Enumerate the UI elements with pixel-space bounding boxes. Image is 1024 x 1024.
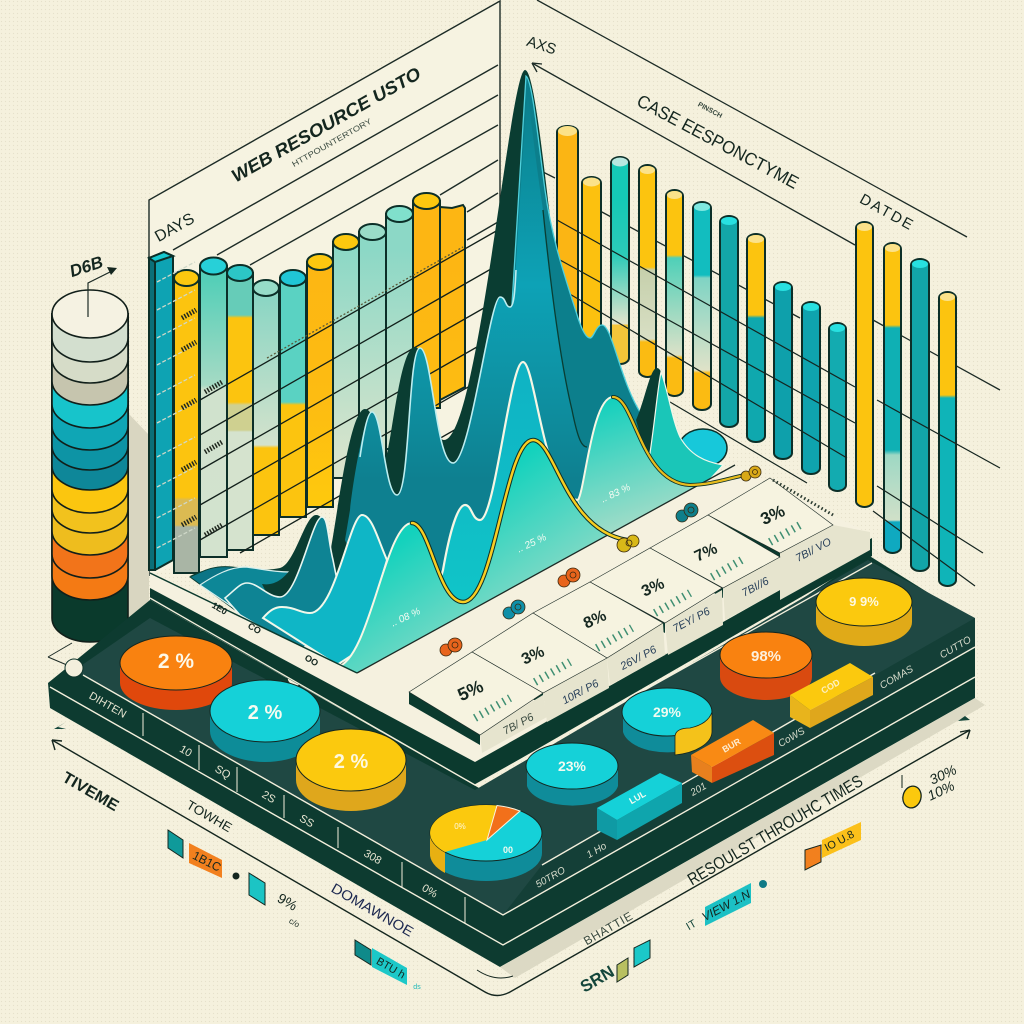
- cyan end blob: [679, 429, 727, 467]
- stack label and arrow: [67, 252, 117, 317]
- right wall bars: [557, 126, 956, 586]
- small end peak face: [650, 372, 723, 490]
- pie chart disc: 0%: [454, 822, 466, 831]
- label: days: DAYS: [152, 210, 197, 246]
- slab right front labels: 201: [688, 781, 709, 799]
- left wall lines over bars: [157, 230, 498, 553]
- small end peak dark side: [636, 368, 690, 470]
- percent cards: [409, 478, 870, 753]
- bar 10: [802, 302, 820, 474]
- card 5: 7%: [692, 540, 720, 566]
- bar 11: [829, 323, 846, 491]
- legend item: teal with cyan label: BTU h: [374, 955, 407, 981]
- card 6: 3%: [758, 501, 788, 529]
- bar 1: [149, 252, 173, 570]
- ridge highlight and inner line: [360, 210, 587, 495]
- pie chart disc: [430, 805, 542, 881]
- knot teal 2: [676, 503, 698, 522]
- cream platform floor: [150, 465, 872, 762]
- knot orange 1: [440, 638, 462, 656]
- disc: cyan 2%: 2 %: [248, 702, 282, 724]
- card 6: 7BI/ VO: [794, 536, 834, 565]
- dark low shoulder: [262, 515, 345, 620]
- card 1: 5%: [454, 676, 486, 705]
- card 2: 10R/ P6: [560, 677, 602, 707]
- legend dot teal: [759, 880, 767, 888]
- bar 9: [774, 282, 792, 459]
- box: yellow: COD: [819, 677, 842, 696]
- legend item: cyan label: [684, 883, 753, 933]
- bar 2: [582, 177, 601, 367]
- legend item: yellow circle percent: [900, 761, 959, 810]
- disc: yellow 2%: [296, 729, 406, 811]
- wall heading: web resource: WEB RESOURCE USTO: [228, 63, 424, 186]
- knot gold: [741, 466, 761, 481]
- platform dark edge: [150, 465, 872, 785]
- cyan centre peak: [420, 362, 600, 650]
- label: date: DATDE: [857, 191, 916, 234]
- card 4: [590, 548, 723, 655]
- yellow trend lines: [412, 397, 745, 602]
- slab divider lines: [50, 647, 975, 945]
- dark rear silhouette: [190, 70, 600, 673]
- slab right front labels: COMAS: [878, 664, 916, 692]
- card 1: [409, 652, 547, 753]
- legend item: teal with cyan label: [355, 940, 421, 991]
- slab left front labels: 2S: [260, 789, 277, 806]
- slab right front labels: 1 Ho: [585, 841, 609, 861]
- mountain chart: [190, 70, 735, 690]
- card 2: [472, 613, 609, 722]
- cyan left hump: [263, 515, 387, 665]
- bar 5: [666, 190, 683, 396]
- bar 1: [557, 126, 578, 386]
- legend item: cyan with percent: [249, 873, 302, 930]
- bar 4: [227, 265, 253, 550]
- card 6: [708, 478, 870, 600]
- disc: cyan 29%: [622, 688, 712, 755]
- knot orange 2: [558, 568, 580, 587]
- card 4: 7EY/ P6: [671, 605, 713, 635]
- marker knots: [440, 466, 761, 656]
- bar 5: [253, 280, 279, 535]
- legend item: orange with yellow label: IO U.8: [823, 829, 856, 854]
- legend item: cyan with percent: c/o: [287, 916, 302, 930]
- box: orange: [691, 720, 774, 783]
- card 1: 7B/ P6: [501, 711, 537, 737]
- wall heading: web resource: HTTPOUNTERTORY: [290, 116, 374, 169]
- wall heading: case response time: CASE EESPONCTYME: [634, 91, 802, 193]
- strip labels: CO: [246, 621, 263, 636]
- platform connector circles: [48, 643, 305, 686]
- disc: cyan 23%: 23%: [558, 758, 587, 774]
- disc: cyan 2%: [210, 680, 320, 762]
- chart value labels: [390, 482, 632, 629]
- bar 7: [720, 216, 738, 427]
- chart value labels: .. 25 %: [516, 532, 548, 555]
- bar 3: [611, 157, 629, 364]
- card 3: [533, 582, 665, 685]
- right wall lines: [532, 0, 1000, 390]
- card 3: 26V/ P6: [618, 643, 659, 673]
- slab right front labels: CoWS: [776, 726, 807, 750]
- slab left front labels: 10: [177, 743, 194, 760]
- bar 10: [386, 206, 413, 449]
- stack label and arrow: D6B: [67, 252, 105, 281]
- teal front left hump: [225, 517, 345, 650]
- disc: cyan 29%: 29%: [653, 704, 682, 720]
- box: orange: BUR: [721, 736, 743, 755]
- disc: cyan 23%: [526, 743, 618, 806]
- disc: orange 98%: [720, 632, 812, 700]
- bar 8: [333, 234, 359, 478]
- card 4: 3%: [639, 575, 667, 601]
- mint rear layer: [578, 397, 735, 560]
- bar 8: [747, 234, 765, 442]
- bar 4: [639, 165, 656, 377]
- legend item: teal with cyan label: ds: [413, 984, 421, 991]
- card 5: [650, 515, 780, 620]
- card 2: 3%: [519, 643, 547, 669]
- slab right front labels: CUTTO: [938, 634, 974, 661]
- bar 9: [359, 224, 386, 467]
- slab left front labels: SQ: [213, 763, 233, 782]
- card 5: 7BI//6: [740, 575, 772, 599]
- card 3: 8%: [581, 607, 609, 633]
- right wall lines over bars: [557, 220, 1000, 586]
- legend item: teal with orange label: 1B1C: [190, 848, 224, 875]
- bar 12: [856, 222, 873, 507]
- legend item: cyan label: IT: [684, 918, 699, 933]
- slab left front labels: 0%: [420, 882, 440, 901]
- stack shadow: [128, 413, 149, 640]
- bar 14: [911, 259, 929, 571]
- slab left front labels: 308: [362, 848, 383, 867]
- box: yellow: [790, 663, 873, 728]
- label: axis: AXS: [524, 33, 558, 58]
- legend item: yellow circle percent: 10%: [925, 777, 957, 804]
- rear teal flank: [500, 76, 660, 560]
- right legend heading: RESOULST THROUHC TIMES: [684, 771, 866, 889]
- legend dot: [232, 872, 240, 880]
- legend item: teal with orange label: [168, 830, 224, 878]
- right label band: [503, 618, 975, 915]
- bar 15: [939, 292, 956, 586]
- legend item: cyan with percent: 9%: [275, 890, 300, 914]
- slab left front labels: DIHTEN: [87, 690, 128, 721]
- legend item: srn: [577, 940, 650, 996]
- pie wedge yellow: [430, 805, 497, 852]
- knot yellow 1: [617, 535, 639, 552]
- box: cyan: LUL: [627, 788, 648, 806]
- slab top surface: [72, 560, 975, 915]
- left legend: tower: TOWHE: [184, 797, 235, 835]
- chart value labels: .. 83 %: [600, 482, 632, 505]
- legend heading: dominance: DOMAWNOE: [329, 880, 416, 940]
- main teal ridge: [345, 93, 640, 670]
- legend item: srn: SRN: [577, 962, 618, 996]
- legend item: orange with yellow label: [805, 822, 861, 870]
- lower slab: [48, 555, 975, 967]
- disc: yellow 2%: 2 %: [334, 751, 368, 773]
- baseline arrow axis: [52, 716, 970, 996]
- disc: yellow 9%: 9 9%: [849, 594, 879, 609]
- strip labels: OO: [303, 653, 320, 668]
- strip labels: 1E0: [210, 600, 229, 617]
- box: cyan: [597, 773, 682, 840]
- strip labels: [210, 600, 320, 668]
- slab right front labels: 50TRO: [534, 865, 568, 891]
- disc: orange 2%: 2 %: [158, 650, 194, 673]
- bar 3: [200, 258, 227, 557]
- bar 2: [174, 270, 199, 573]
- slab left front labels: [87, 690, 440, 901]
- mint front layer: [337, 440, 627, 690]
- disc: yellow 9%: [816, 578, 912, 646]
- bar 6: [280, 270, 306, 517]
- chart value labels: .. 08 %: [390, 606, 422, 629]
- left legend: timeline: TIVEME: [59, 769, 122, 815]
- low rear strips: [190, 567, 280, 610]
- beige shadow strip: [500, 698, 985, 978]
- wall heading: case response time: PINSCH: [696, 101, 723, 120]
- left wall outline with grid lines: [149, 1, 500, 576]
- legend item: yellow circle percent: 30%: [927, 761, 959, 788]
- legend item: cyan label: VIEW 1.N: [700, 887, 753, 924]
- disc: orange 2%: [120, 636, 232, 710]
- pie wedge orange: [487, 806, 520, 840]
- slab left front labels: SS: [297, 813, 316, 830]
- stacked cylinder: [52, 290, 128, 642]
- bar 12: [440, 205, 465, 400]
- bar 13: [884, 243, 901, 553]
- bar 7: [307, 254, 333, 507]
- left wall bars: [149, 193, 465, 573]
- slab right front labels: [534, 634, 974, 891]
- right legend label: BHATTIE: [581, 909, 635, 948]
- knot teal 1: [503, 600, 525, 619]
- pie chart disc: 00: [503, 845, 513, 855]
- disc: orange 98%: 98%: [751, 648, 781, 665]
- bar 6: [693, 202, 711, 410]
- bar 11: [413, 193, 440, 408]
